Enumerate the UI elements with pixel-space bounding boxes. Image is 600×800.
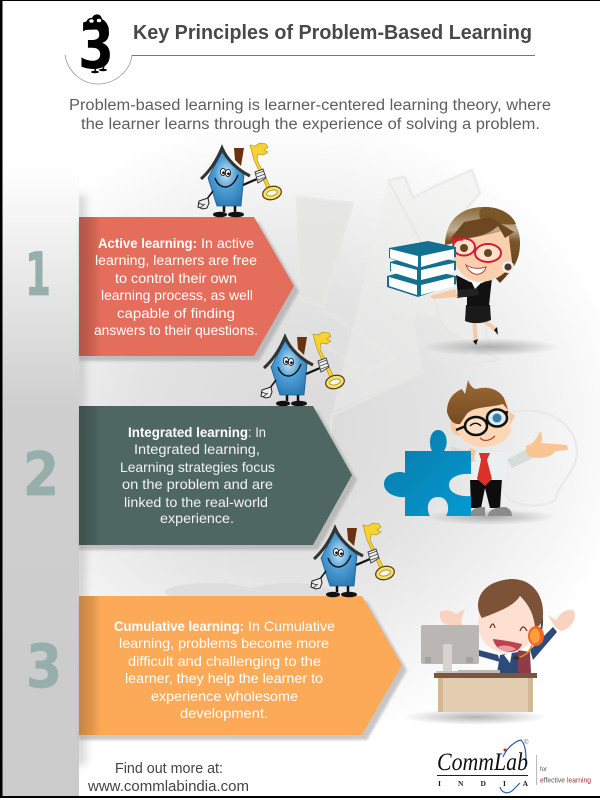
title: Key Principles of Problem-Based Learning [133, 21, 532, 44]
panel text: Cumulative learning: [114, 619, 244, 634]
footer: find out more: Find out more at: [115, 761, 223, 777]
panel text: : In [248, 425, 266, 440]
panel text: to control their own [115, 271, 237, 286]
panel text [120, 425, 275, 526]
arrow shape [79, 596, 402, 735]
illustration: desk worker with headset [403, 579, 575, 725]
panel text: on the problem and are [122, 477, 273, 492]
logo: CommLab India: © [524, 739, 529, 746]
icon: house with key 1 [198, 143, 283, 217]
logo: CommLab India [437, 739, 591, 793]
number 2: 2 [23, 440, 59, 510]
icon: house with key 2 [261, 332, 346, 406]
panel text: experience wholesome [151, 689, 298, 704]
number 1: 1 [25, 240, 51, 310]
intro text: the learner learns through the experience of solving a problem. [81, 116, 540, 133]
header: big 3 mascot [65, 10, 132, 84]
panel text: Integrated learning, [134, 442, 260, 457]
puzzle piece [384, 430, 471, 516]
panel 2: integrated learning [23, 406, 357, 550]
panel text: difficult and challenging to the [128, 654, 321, 669]
panel text: capable of finding [117, 306, 235, 321]
logo: CommLab India: effective learning [540, 778, 591, 784]
panel text: learning process, as well [101, 288, 253, 303]
panel text: experience. [160, 511, 234, 526]
panel text: Integrated learning [128, 425, 248, 440]
panel 3: cumulative learning [26, 596, 407, 740]
panel text: Learning strategies focus [120, 460, 275, 475]
footer: find out more: www.commlabindia.com [87, 779, 249, 795]
illustration: man with puzzle piece [384, 380, 568, 525]
panel text: In active [201, 236, 254, 251]
footer: find out more [87, 761, 249, 795]
panel text: In Cumulative [248, 619, 335, 634]
number 3: 3 [26, 632, 62, 702]
intro text: Problem-based learning is learner-centered learning theory, where [69, 97, 551, 114]
panel text: learning, problems become more [119, 636, 329, 651]
intro text [69, 97, 551, 133]
panel text: development. [180, 706, 268, 721]
arrow shape [79, 406, 352, 545]
panel text [94, 236, 258, 338]
left grey strip [2, 165, 79, 796]
illustration: woman carrying books [387, 207, 558, 356]
panel text: learning, learners are free [95, 253, 257, 268]
panel text: answers to their questions. [94, 323, 258, 338]
logo: CommLab India: I N D I A [438, 779, 529, 788]
panel text [114, 619, 335, 721]
panel text: Active learning: [98, 236, 197, 251]
panel text: learner, they help the learner to [125, 671, 323, 686]
icon: house with key 3 [311, 523, 396, 597]
panel text: linked to the real-world [124, 495, 268, 510]
arrow shape [79, 217, 294, 356]
logo: CommLab India: CommLab [437, 749, 528, 776]
logo: CommLab India: for [540, 767, 547, 773]
title rule [132, 55, 535, 56]
panel 1: active learning [25, 217, 299, 361]
header: big 3 mascot: 3 [78, 10, 114, 84]
